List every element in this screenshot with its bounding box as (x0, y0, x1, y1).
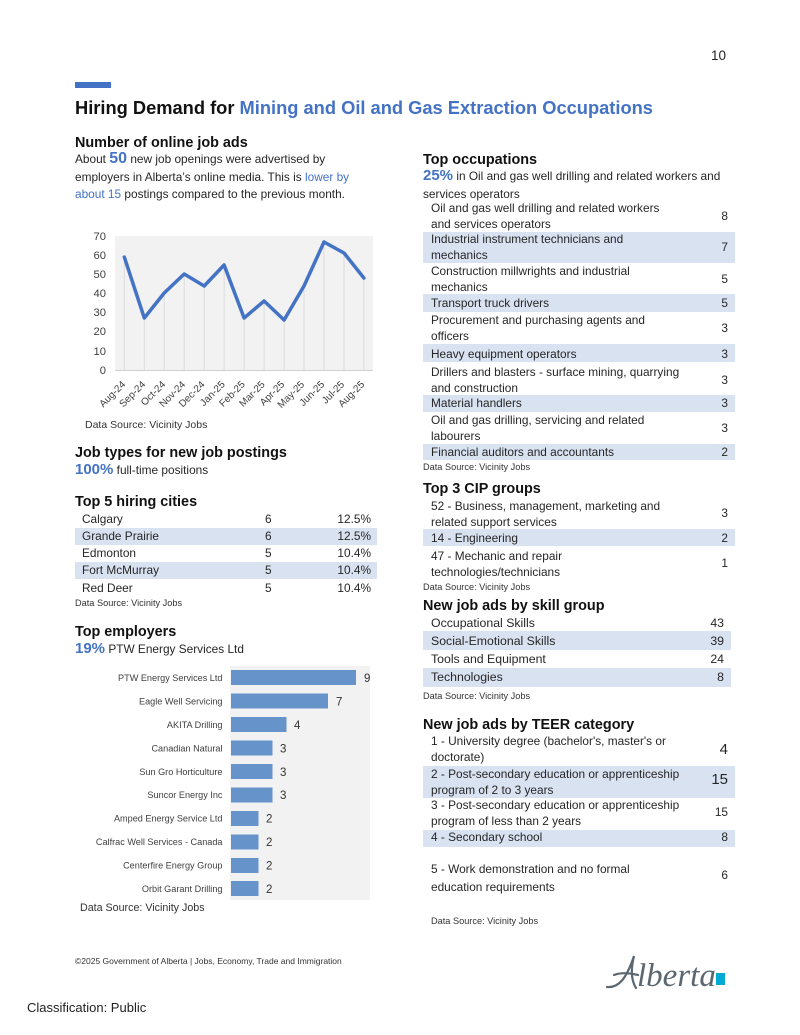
line chart: online job ads by month: 40 (94, 288, 106, 300)
line chart: online job ads by month: 50 (94, 269, 106, 281)
line chart: online job ads by month: Dec-24 (177, 379, 208, 410)
table: TEER category: 15 (715, 805, 728, 819)
line chart: online job ads by month: 20 (94, 326, 106, 338)
line chart: online job ads by month: May-25 (276, 379, 307, 411)
table: top occupations: 3 (721, 321, 728, 335)
text block: job ads summary: about 15 postings compared to the previous month. (75, 187, 345, 201)
table: top occupations: Industrial instrument technicians and (431, 232, 623, 246)
logo: Alberta (606, 956, 725, 994)
bar chart: top employers: 2 (266, 884, 272, 896)
table: top occupations: 3 (721, 396, 728, 410)
table: TEER category: 2 - Post-secondary education or apprenticeship (431, 767, 679, 781)
line chart: online job ads by month: Jul-25 (320, 379, 347, 406)
heading: skill group: New job ads by skill group (423, 598, 605, 614)
table: top occupations: mechanics (431, 248, 488, 262)
line chart: online job ads by month: Nov-24 (158, 379, 188, 410)
bar chart: top employers: Centerfire Energy Group (123, 860, 222, 870)
table: top 5 hiring cities (75, 512, 377, 595)
heading: top occupations: Top occupations (423, 152, 537, 168)
table: TEER category: 4 (720, 741, 728, 758)
data source: CIP: Data Source: Vicinity Jobs (423, 582, 530, 592)
table: top occupations: Heavy equipment operators (431, 347, 576, 361)
table: skill groups (423, 616, 731, 687)
table: top occupations: 5 (721, 272, 728, 286)
table: TEER category: education requirements (431, 880, 555, 894)
table: top occupations: 3 (721, 347, 728, 361)
table: top 5 hiring cities: Grande Prairie (82, 529, 159, 543)
line chart: online job ads by month: Jan-25 (198, 379, 228, 409)
title accent bar (75, 82, 111, 88)
table: TEER category: program of less than 2 years (431, 814, 581, 828)
table: CIP groups: 2 (721, 531, 728, 545)
table: top occupations: 7 (721, 240, 728, 254)
table: top occupations: mechanics (431, 280, 488, 294)
line chart: online job ads by month: 0 (100, 365, 106, 377)
table: TEER category: 5 - Work demonstration and no formal (431, 862, 630, 876)
text block: top occupations: services operators (423, 186, 520, 200)
text block: job types: 100% full-time positions (75, 461, 208, 478)
table: top occupations: Drillers and blasters - surface mining, quarrying (431, 365, 679, 379)
table: top 5 hiring cities: Fort McMurray (82, 563, 159, 577)
bar chart: top employers: Calfrac Well Services - Canada (96, 837, 223, 847)
table: top 5 hiring cities: 10.4% (337, 546, 371, 560)
line chart: online job ads by month: Oct-24 (139, 379, 168, 408)
table: skill groups: 8 (717, 670, 724, 684)
text block: job ads summary: employers in Alberta’s online media. This is lower by (75, 170, 349, 184)
classification label: Classification: Public (27, 1000, 146, 1015)
table: top occupations: 5 (721, 296, 728, 310)
bar chart: top employers: Canadian Natural (151, 744, 222, 754)
table: top occupations: 8 (721, 209, 728, 223)
bar chart: top employers: Sun Gro Horticulture (139, 767, 222, 777)
bar chart: top employers: Amped Energy Service Ltd (114, 814, 222, 824)
table: TEER category: doctorate) (431, 750, 484, 764)
table: skill groups: Tools and Equipment (431, 652, 546, 666)
bar chart: top employers: 9 (364, 673, 370, 685)
bar chart: top employers: 7 (336, 696, 342, 708)
text block: job ads summary (75, 150, 349, 201)
table: top occupations: and services operators (431, 216, 551, 230)
table: top 5 hiring cities: 10.4% (337, 563, 371, 577)
table: TEER category: 15 (711, 771, 728, 788)
table: skill groups: 39 (710, 634, 724, 648)
table: top occupations: 3 (721, 421, 728, 435)
line chart: online job ads by month: 30 (94, 307, 106, 319)
table: top 5 hiring cities: Calgary (82, 512, 123, 526)
bar chart: top employers: Suncor Energy Inc (147, 790, 223, 800)
table: skill groups: 43 (710, 616, 724, 630)
bar chart: top employers: 4 (294, 720, 301, 732)
line chart: online job ads by month: Aug-25 (337, 379, 367, 410)
footer: copyright: ©2025 Government of Alberta | Jobs, Economy, Trade and Immigration (75, 956, 342, 966)
table: CIP groups: technologies/technicians (431, 564, 560, 578)
table: top occupations: Oil and gas well drilling and related workers (431, 201, 659, 215)
table: top occupations: 3 (721, 373, 728, 387)
data source: cities: Data Source: Vicinity Jobs (75, 598, 182, 608)
table: CIP groups (423, 499, 735, 578)
bar chart: top employers: 2 (266, 837, 272, 849)
table: top occupations (423, 201, 735, 460)
table: top 5 hiring cities: 5 (265, 546, 272, 560)
table: CIP groups: 14 - Engineering (431, 531, 518, 545)
table: top occupations: and construction (431, 380, 518, 394)
data source: employers: Data Source: Vicinity Jobs (80, 902, 205, 914)
line chart: online job ads by month: 60 (94, 250, 106, 262)
data source: occupations: Data Source: Vicinity Jobs (423, 462, 530, 472)
line chart: online job ads by month (94, 231, 373, 411)
table: TEER category: 4 - Secondary school (431, 830, 542, 844)
text block: top occupations (423, 167, 720, 200)
page number: 10 (711, 48, 726, 63)
table: top 5 hiring cities: 6 (265, 529, 272, 543)
table: top occupations: Oil and gas drilling, servicing and related (431, 413, 644, 427)
table: top occupations: labourers (431, 428, 480, 442)
table: skill groups: Social-Emotional Skills (431, 634, 555, 648)
heading: top employers: Top employers (75, 624, 176, 640)
table: TEER category: program of 2 to 3 years (431, 782, 553, 796)
table: CIP groups: 1 (721, 556, 728, 570)
line chart: online job ads by month: Apr-25 (258, 379, 287, 408)
data source: skill groups: Data Source: Vicinity Jobs (423, 691, 530, 701)
table: top 5 hiring cities: 5 (265, 581, 272, 595)
table: top 5 hiring cities: 12.5% (337, 529, 371, 543)
table: top occupations: Material handlers (431, 396, 522, 410)
table: top occupations: Procurement and purchasing agents and (431, 313, 645, 327)
heading: job types: Job types for new job postings (75, 445, 287, 461)
table: TEER category: 1 - University degree (bachelor's, master's or (431, 734, 666, 748)
table: TEER category: 3 - Post-secondary education or apprenticeship (431, 798, 679, 812)
bar chart: top employers (96, 666, 370, 900)
table: top occupations: Construction millwrights and industrial (431, 264, 630, 278)
title: Hiring Demand for Mining and Oil and Gas Extraction Occupations (75, 97, 653, 118)
table: skill groups: 24 (710, 652, 724, 666)
line chart: online job ads by month: Feb-25 (217, 379, 248, 410)
table: skill groups: Occupational Skills (431, 616, 535, 630)
table: TEER category (423, 734, 735, 894)
bar chart: top employers: 2 (266, 814, 272, 826)
table: top 5 hiring cities: 5 (265, 563, 272, 577)
table: CIP groups: related support services (431, 514, 557, 528)
table: skill groups: Technologies (431, 670, 503, 684)
table: TEER category: 8 (721, 830, 728, 844)
table: top 5 hiring cities: 12.5% (337, 512, 371, 526)
data source: TEER: Data Source: Vicinity Jobs (431, 916, 538, 926)
text block: top employers: 19% PTW Energy Services Ltd (75, 640, 244, 657)
data source: line chart: Data Source: Vicinity Jobs (85, 419, 207, 431)
heading: top 3 CIP groups: Top 3 CIP groups (423, 481, 541, 497)
table: top 5 hiring cities: 6 (265, 512, 272, 526)
table: CIP groups: 52 - Business, management, marketing and (431, 499, 660, 513)
bar chart: top employers: 3 (280, 790, 286, 802)
line chart: online job ads by month: 10 (94, 346, 106, 358)
table: top 5 hiring cities: 10.4% (337, 581, 371, 595)
line chart: online job ads by month: Aug-24 (98, 379, 128, 410)
table: top occupations: officers (431, 328, 469, 342)
table: CIP groups: 47 - Mechanic and repair (431, 549, 562, 563)
table: top 5 hiring cities: Red Deer (82, 581, 133, 595)
bar chart: top employers: 3 (280, 744, 286, 756)
table: top 5 hiring cities: Edmonton (82, 546, 136, 560)
line chart: online job ads by month: 70 (94, 231, 106, 243)
line chart: online job ads by month: Jun-25 (298, 379, 327, 409)
table: top occupations: 2 (721, 445, 728, 459)
table: TEER category: 6 (721, 868, 728, 882)
heading: number of online job ads: Number of online job ads (75, 135, 248, 151)
table: top occupations: Transport truck drivers (431, 296, 549, 310)
bar chart: top employers: 3 (280, 767, 286, 779)
text block: top occupations: 25% in Oil and gas well drilling and related workers and (423, 167, 720, 184)
bar chart: top employers: Orbit Garant Drilling (142, 884, 222, 894)
line chart: online job ads by month: Mar-25 (237, 379, 268, 410)
line chart: online job ads by month: Sep-24 (118, 379, 148, 410)
text block: job ads summary: About 50 new job openings were advertised by (75, 150, 325, 167)
logo: Alberta: lberta (637, 958, 716, 994)
bar chart: top employers: PTW Energy Services Ltd (118, 673, 222, 683)
bar chart: top employers: Eagle Well Servicing (139, 696, 222, 706)
heading: TEER category: New job ads by TEER category (423, 717, 634, 733)
bar chart: top employers: 2 (266, 860, 272, 872)
table: CIP groups: 3 (721, 506, 728, 520)
heading: top 5 hiring cities: Top 5 hiring cities (75, 494, 197, 510)
table: top occupations: Financial auditors and accountants (431, 445, 614, 459)
bar chart: top employers: AKITA Drilling (167, 720, 222, 730)
